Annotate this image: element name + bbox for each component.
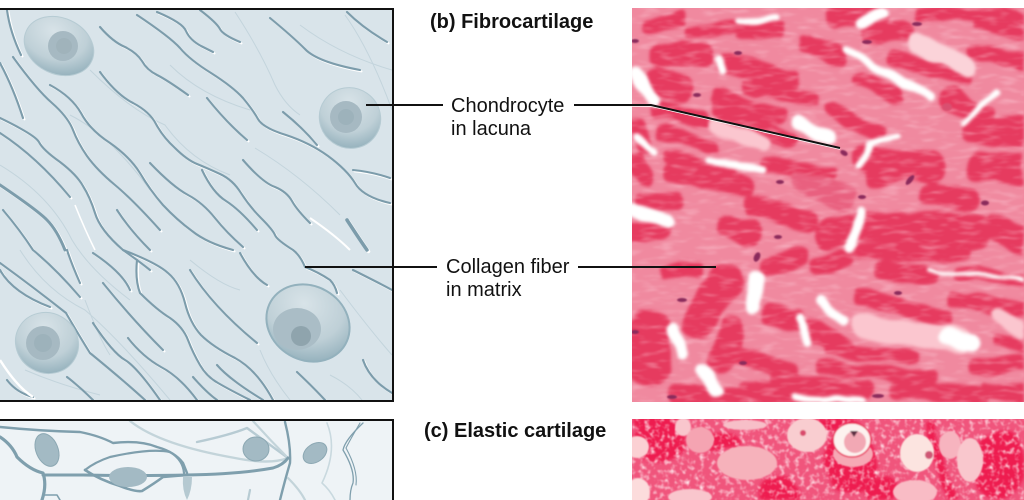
speckle texture xyxy=(632,419,1024,500)
chondrocyte: far right xyxy=(299,438,331,468)
chondrocyte: lens centre xyxy=(109,467,147,487)
panel: elastic cartilage micrograph xyxy=(625,418,1024,500)
red collagen bundles xyxy=(632,13,1023,398)
panel border xyxy=(0,420,393,500)
faint background fibers xyxy=(0,12,392,400)
lacunae xyxy=(625,418,983,500)
leader: chondrocyte right xyxy=(574,105,840,149)
chondrocyte cell top right xyxy=(307,76,393,160)
leader: collagen right xyxy=(578,266,716,268)
streak texture xyxy=(632,8,1024,402)
chondrocyte cell bottom left xyxy=(4,301,90,385)
chondrocyte cell top left xyxy=(15,5,103,87)
label: collagen fiber in matrix: Collagen fiber xyxy=(446,256,569,278)
panel: fibrocartilage illustration xyxy=(0,5,394,401)
chondrocyte: round right of centre xyxy=(243,437,269,461)
nuclei xyxy=(631,22,989,399)
label: chondrocyte in lacuna: Chondrocyte xyxy=(451,95,564,117)
leader: collagen left xyxy=(305,266,437,268)
chondrocyte: elongated left xyxy=(30,430,64,470)
panel: fibrocartilage micrograph xyxy=(631,8,1024,402)
panel: elastic cartilage illustration xyxy=(0,420,393,500)
bright red matrix xyxy=(632,418,1024,500)
label: collagen fiber in matrix: in matrix xyxy=(446,279,522,301)
collagen fibers xyxy=(0,10,394,401)
pale clefts xyxy=(633,13,1023,400)
label: chondrocyte in lacuna: in lacuna xyxy=(451,118,532,140)
leader: chondrocyte left xyxy=(366,104,443,106)
panel border xyxy=(0,9,393,401)
heading: elastic cartilage: (c) Elastic cartilage xyxy=(424,420,606,442)
chondrocyte cell bottom right xyxy=(252,269,364,377)
elastic fibers xyxy=(0,421,363,500)
heading: fibrocartilage: (b) Fibrocartilage xyxy=(430,11,593,33)
